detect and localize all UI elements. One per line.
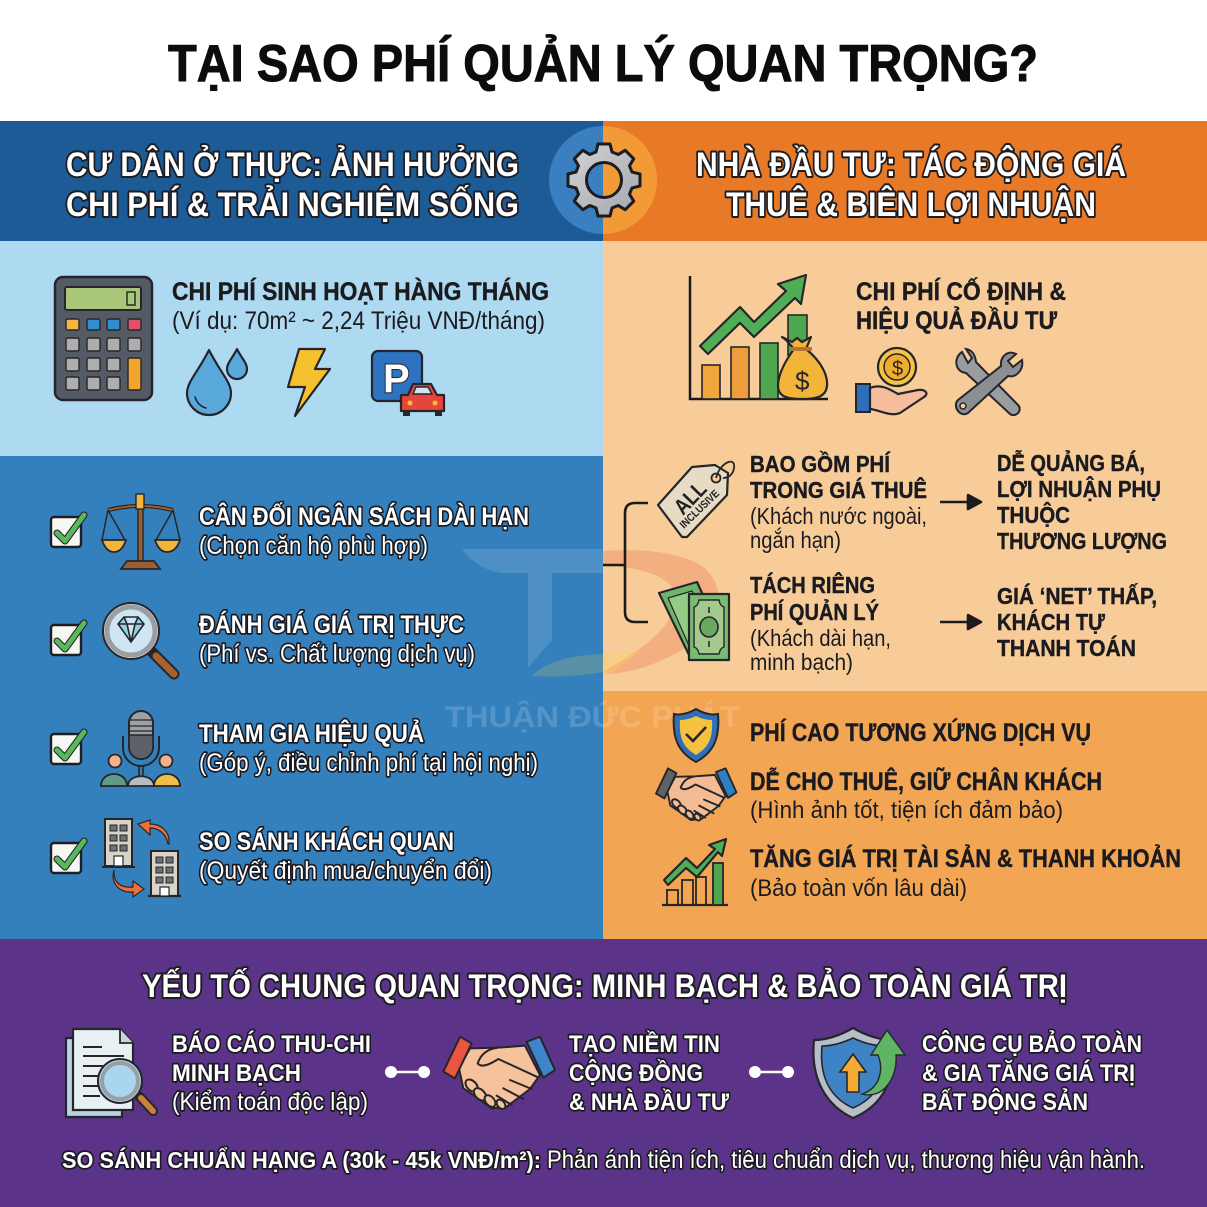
text: preservation tool: BẤT ĐỘNG SẢN: [922, 1087, 1088, 1116]
text: included outcome: DỄ QUẢNG BÁ,: [997, 448, 1145, 476]
text: transparent report: BÁO CÁO THU-CHI: [172, 1030, 371, 1058]
text: fee separate: TÁCH RIÊNG: [750, 571, 875, 598]
text: budget balance: (Chọn căn hộ phù hợp): [199, 532, 428, 560]
text: fee separate: minh bạch): [750, 649, 853, 675]
icon: small growth chart: [662, 839, 728, 905]
text: participate: (Góp ý, điều chỉnh phí tại hội nghị): [199, 749, 538, 777]
icon: shield with check: [674, 709, 718, 762]
heading: investors: NHÀ ĐẦU TƯ: TÁC ĐỘNG GIÁ: [696, 145, 1126, 184]
text: fixed costs: [856, 276, 1066, 335]
text: fee separate: [750, 571, 891, 675]
watermark logo: THUẬN ĐỨC PHÁT: [445, 700, 740, 734]
text: separate outcome: THANH TOÁN: [997, 634, 1136, 661]
text: grade A benchmark: Phản ánh tiện ích, tiêu chuẩn dịch vụ, thương hiệu vận hành.: [547, 1146, 1145, 1174]
icon: microphone with people: [101, 711, 180, 786]
text: included outcome: THUỘC: [997, 501, 1070, 528]
panel: resident checklist: [0, 456, 603, 939]
text: fee included: [750, 450, 927, 553]
icon: large handshake: [443, 1037, 555, 1111]
icon: growth chart with money bag: $: [795, 366, 810, 396]
text: preservation tool: & GIA TĂNG GIÁ TRỊ: [922, 1059, 1135, 1087]
text: participate: THAM GIA HIỆU QUẢ: [199, 718, 424, 748]
text: transparent report: (Kiểm toán độc lập): [172, 1088, 368, 1116]
connector 2: [749, 1066, 794, 1078]
text: preservation tool: CÔNG CỤ BẢO TOÀN: [922, 1029, 1142, 1058]
text: build trust: [569, 1030, 729, 1116]
panel: resident monthly costs: [0, 241, 603, 456]
icon: all inclusive price tag: INCLUSIVE: [678, 488, 722, 531]
arrow: fee included result: [940, 495, 981, 509]
text: budget balance: [199, 501, 529, 560]
icon: lightning bolt: [288, 349, 330, 416]
text: fee separate: PHÍ QUẢN LÝ: [750, 597, 879, 625]
text: objective comparison: (Quyết định mua/chuyển đổi): [199, 857, 492, 885]
heading: investors: THUÊ & BIÊN LỢI NHUẬN: [726, 186, 1096, 224]
icon: hand with coin: $: [892, 358, 903, 380]
text: grade A benchmark: SO SÁNH CHUẨN HẠNG A (30k - 45k VNĐ/m²):: [62, 1146, 541, 1173]
icon: all inclusive price tag: [658, 462, 734, 537]
panel: investor header: [603, 121, 1207, 241]
text: transparent report: [172, 1030, 371, 1116]
text: easy to rent: (Hình ảnh tốt, tiện ích đảm bảo): [750, 797, 1063, 824]
panel: investor fixed costs and pricing: [603, 241, 1207, 691]
panel: shared factors: [0, 939, 1207, 1207]
connector 1: [385, 1066, 430, 1078]
text: asset value and liquidity: (Bảo toàn vốn lâu dài): [750, 875, 967, 902]
icon: shield with growth arrows: [813, 1028, 905, 1118]
text: easy to rent: DỄ CHO THUÊ, GIỮ CHÂN KHÁCH: [750, 766, 1102, 796]
text: asset value and liquidity: [750, 843, 1181, 902]
text: included outcome: [997, 448, 1167, 554]
text: participate: [199, 718, 538, 777]
text: build trust: TẠO NIỀM TIN: [569, 1030, 720, 1058]
text: monthly living cost: (Ví dụ: 70m² ~ 2,24 Triệu VNĐ/tháng): [172, 307, 545, 335]
icon: checkbox: [51, 515, 84, 547]
text: fee separate: (Khách dài hạn,: [750, 625, 891, 651]
text: fee included: ngắn hạn): [750, 527, 841, 553]
text: fixed costs: HIỆU QUẢ ĐẦU TƯ: [856, 305, 1057, 335]
heading: shared factor: YẾU TỐ CHUNG QUAN TRỌNG: MINH BẠCH & BẢO TOÀN GIÁ TRỊ: [142, 968, 1067, 1004]
text: real value: [199, 610, 475, 668]
icon: audit document: [66, 1029, 153, 1117]
icon: parking with car: P: [383, 357, 410, 401]
text: build trust: & NHÀ ĐẦU TƯ: [569, 1088, 729, 1116]
text: monthly living cost: [172, 277, 549, 335]
text: grade A benchmark: [62, 1146, 1145, 1174]
arrow: fee separate result: [940, 615, 981, 629]
icon: parking with car: [372, 351, 444, 416]
icon: hand with coin: [856, 348, 926, 414]
title: TẠI SAO PHÍ QUẢN LÝ QUAN TRỌNG?: [168, 34, 1038, 93]
text: fee included: TRONG GIÁ THUÊ: [750, 476, 927, 503]
heading: residents: CƯ DÂN Ở THỰC: ẢNH HƯỞNG: [66, 146, 519, 184]
checklist item 3: [51, 711, 538, 786]
watermark logo: [445, 549, 740, 734]
heading: residents: [66, 146, 519, 224]
icon: balance scale: [102, 494, 180, 569]
icon: magnifier with diamond: [103, 603, 174, 674]
heading: residents: CHI PHÍ & TRẢI NGHIỆM SỐNG: [66, 185, 519, 224]
icon: small handshake: [656, 768, 736, 822]
checklist item 2: [51, 603, 475, 674]
text: preservation tool: [922, 1029, 1142, 1116]
text: included outcome: LỢI NHUẬN PHỤ: [997, 475, 1161, 502]
checklist item 1: [51, 494, 529, 569]
text: transparent report: MINH BẠCH: [172, 1060, 301, 1087]
text: fixed costs: CHI PHÍ CỐ ĐỊNH &: [856, 276, 1066, 306]
icon: checkbox: [51, 732, 84, 764]
text: included outcome: THƯƠNG LƯỢNG: [997, 528, 1167, 554]
text: easy to rent: [750, 766, 1102, 824]
text: objective comparison: [199, 827, 492, 885]
panel: investor benefits: [603, 691, 1207, 939]
text: objective comparison: SO SÁNH KHÁCH QUAN: [199, 827, 454, 856]
checklist item 4: [51, 819, 492, 897]
text: separate outcome: KHÁCH TỰ: [997, 608, 1106, 635]
text: separate outcome: [997, 582, 1157, 661]
text: budget balance: CÂN ĐỐI NGÂN SÁCH DÀI HẠN: [199, 501, 529, 531]
text: fee included: (Khách nước ngoài,: [750, 503, 927, 529]
heading: investors: [696, 145, 1126, 224]
icon: checkbox: [51, 623, 84, 655]
icon: water drops: [187, 349, 247, 415]
text: build trust: CỘNG ĐỒNG: [569, 1059, 703, 1087]
icon: banknotes: [659, 582, 729, 660]
icon: comparing buildings: [102, 819, 181, 897]
text: real value: ĐÁNH GIÁ GIÁ TRỊ THỰC: [199, 610, 464, 639]
bracket connector: [603, 503, 648, 622]
text: monthly living cost: CHI PHÍ SINH HOẠT HÀNG THÁNG: [172, 277, 549, 306]
icon: calculator: [55, 277, 152, 400]
icon: central gear: [549, 126, 657, 234]
icon: crossed wrenches: [956, 349, 1022, 415]
text: fee included: BAO GỒM PHÍ: [750, 450, 891, 477]
icon: growth chart with money bag: [690, 275, 828, 399]
icon: checkbox: [51, 841, 84, 873]
icon: all inclusive price tag: ALL: [669, 476, 712, 519]
text: separate outcome: GIÁ ‘NET’ THẤP,: [997, 582, 1157, 609]
text: high fee matches service: PHÍ CAO TƯƠNG XỨNG DỊCH VỤ: [750, 717, 1091, 747]
text: real value: (Phí vs. Chất lượng dịch vụ): [199, 640, 475, 668]
panel: resident header: [0, 121, 603, 241]
